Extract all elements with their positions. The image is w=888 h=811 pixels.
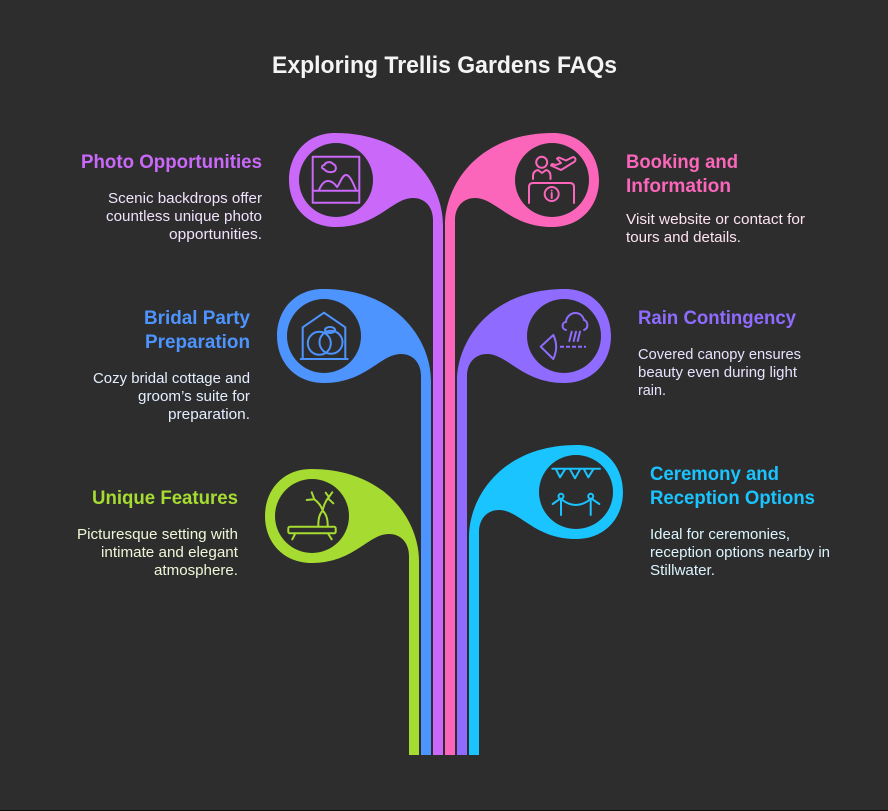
stem and bulb: unique features <box>265 469 419 755</box>
stem and bulb: photo opportunities <box>289 133 443 755</box>
text: unique features: Picturesque setting with <box>77 527 238 543</box>
panel: rain contingency <box>457 289 801 755</box>
stem and bulb: bridal party <box>277 289 431 755</box>
panel: bridal party preparation <box>93 289 431 755</box>
stem and bulb: ceremony <box>469 445 623 755</box>
icon: rain cloud and canopy <box>541 313 587 359</box>
text: bridal party preparation <box>93 371 250 423</box>
text: ceremony and reception options: reception options nearby in <box>650 545 830 561</box>
heading: rain contingency: Rain Contingency <box>638 307 796 329</box>
icon: picture frame <box>313 157 359 203</box>
text: ceremony and reception options: Ideal for ceremonies, <box>650 527 790 543</box>
title: Exploring Trellis Gardens FAQs <box>272 52 617 79</box>
panel: unique features <box>77 469 419 755</box>
text: rain contingency: rain. <box>638 383 666 399</box>
text: bridal party preparation: preparation. <box>168 407 250 423</box>
stem and bulb: rain contingency <box>457 289 611 755</box>
panel: ceremony and reception options <box>469 445 830 755</box>
heading: unique features: Unique Features <box>92 487 238 509</box>
heading: bridal party preparation <box>144 307 250 353</box>
heading: ceremony and reception options: Ceremony and <box>650 463 779 485</box>
heading: booking and information: Information <box>626 175 731 197</box>
text: rain contingency <box>638 347 801 399</box>
text: rain contingency: beauty even during light <box>638 365 797 381</box>
text: unique features: intimate and elegant <box>101 545 238 561</box>
text: ceremony and reception options <box>650 527 830 579</box>
text: booking and information: tours and details. <box>626 230 741 246</box>
icon: bunting and rope barrier <box>552 469 600 515</box>
text: bridal party preparation: groom’s suite for <box>138 389 250 405</box>
icon: house with rings <box>301 313 348 359</box>
stem and bulb: booking <box>445 133 599 755</box>
text: photo opportunities: Scenic backdrops offer <box>108 191 262 207</box>
heading: bridal party preparation: Preparation <box>145 331 250 353</box>
panel: photo opportunities <box>81 133 443 755</box>
text: rain contingency: Covered canopy ensures <box>638 347 801 363</box>
heading: bridal party preparation: Bridal Party <box>144 307 250 329</box>
text: photo opportunities: countless unique photo <box>106 209 262 225</box>
heading: ceremony and reception options <box>650 463 815 509</box>
text: booking and information <box>626 212 805 246</box>
heading: ceremony and reception options: Reception Options <box>650 487 815 509</box>
text: ceremony and reception options: Stillwater. <box>650 563 715 579</box>
text: bridal party preparation: Cozy bridal cottage and <box>93 371 250 387</box>
icon: bench with plant <box>288 492 336 539</box>
text: unique features <box>77 527 238 579</box>
text: booking and information: Visit website or contact for <box>626 212 805 228</box>
heading: booking and information <box>626 151 738 197</box>
heading: photo opportunities: Photo Opportunities <box>81 151 262 173</box>
heading: booking and information: Booking and <box>626 151 738 173</box>
text: photo opportunities <box>106 191 262 243</box>
text: photo opportunities: opportunities. <box>169 227 262 243</box>
text: unique features: atmosphere. <box>154 563 238 579</box>
icon: info desk with plane <box>529 157 575 203</box>
panel: booking and information <box>445 133 805 755</box>
